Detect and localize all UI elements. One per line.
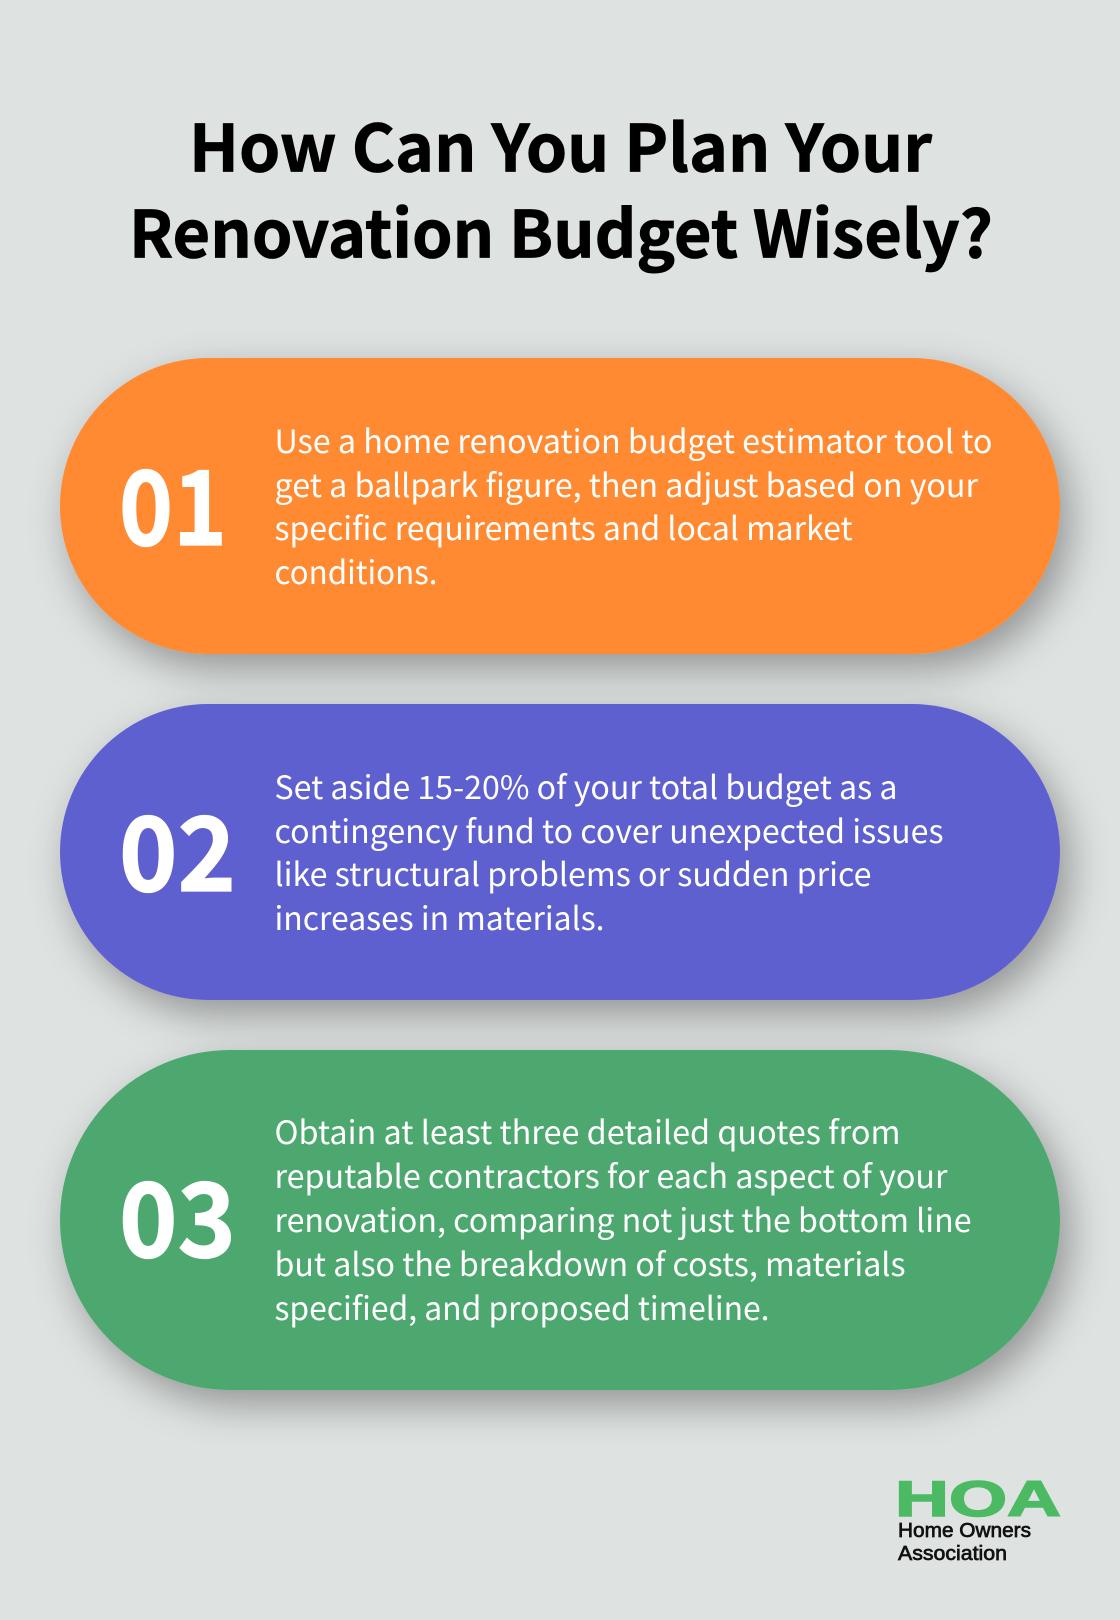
text: step 02 description bbox=[274, 763, 944, 940]
text: step 01 description bbox=[274, 417, 992, 594]
text: step 03 description: renovation, comparing not just the bottom line bbox=[274, 1196, 972, 1242]
text: step 02 description: like structural problems or sudden price bbox=[274, 850, 872, 896]
text: step 02 description: contingency fund to cover unexpected issues bbox=[274, 807, 944, 853]
number 02: 02 bbox=[119, 772, 236, 921]
panel: step 03 bbox=[60, 1050, 1060, 1390]
text: step 03 description: Obtain at least three detailed quotes from bbox=[274, 1108, 900, 1154]
text: step 02 description: increases in materials. bbox=[274, 894, 604, 940]
text: step 01 description: Use a home renovation budget estimator tool to bbox=[274, 417, 992, 463]
text: step 03 description: but also the breakdown of costs, materials bbox=[274, 1240, 905, 1286]
number 01: 01 bbox=[119, 426, 227, 575]
logo: HOA Home Owners Association bbox=[895, 1471, 1061, 1565]
text: step 03 description bbox=[274, 1108, 972, 1330]
logo: HOA Home Owners Association: HOA bbox=[895, 1471, 1061, 1527]
text: step 03 description: specified, and proposed timeline. bbox=[274, 1284, 770, 1330]
text: step 01 description: conditions. bbox=[274, 548, 438, 594]
title bbox=[129, 96, 993, 276]
text: step 03 description: reputable contractors for each aspect of your bbox=[274, 1152, 948, 1198]
logo: HOA Home Owners Association: Home Owners bbox=[898, 1520, 1031, 1542]
title: How Can You Plan Your bbox=[189, 96, 933, 190]
number 03: 03 bbox=[119, 1138, 236, 1287]
text: step 01 description: get a ballpark figure, then adjust based on your bbox=[274, 461, 979, 507]
text: step 02 description: Set aside 15-20% of your total budget as a bbox=[274, 763, 898, 809]
panel: step 02 bbox=[60, 704, 1060, 1000]
title: Renovation Budget Wisely? bbox=[129, 182, 993, 276]
logo: HOA Home Owners Association: Association bbox=[898, 1543, 1007, 1565]
text: step 01 description: specific requirements and local market bbox=[274, 504, 852, 550]
panel: step 01 bbox=[60, 358, 1060, 654]
